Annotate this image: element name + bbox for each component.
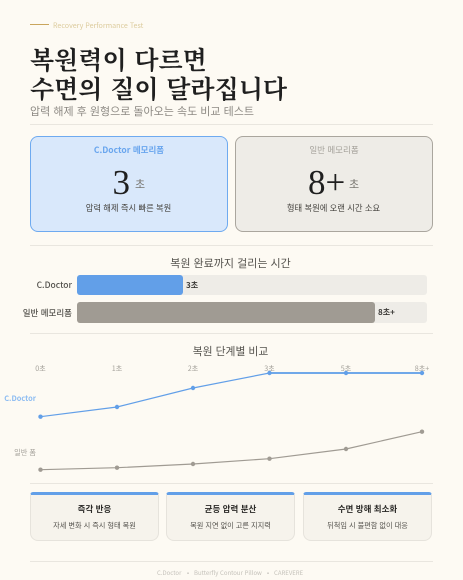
big number: 8+ bbox=[308, 163, 345, 202]
footer: CAREVERE bbox=[274, 568, 303, 577]
axis labels: 1초 bbox=[112, 364, 123, 374]
axis labels: 3초 bbox=[264, 364, 275, 374]
footer: • bbox=[187, 568, 189, 577]
feature title: 균등 압력 분산 bbox=[205, 503, 256, 515]
panel: C.Doctor result bbox=[30, 136, 228, 232]
series: C.Doctor bbox=[4, 371, 424, 419]
footer: C.Doctor bbox=[157, 568, 181, 577]
unit: 초 bbox=[349, 176, 359, 192]
heading: bar chart: 복원 완료까지 걸리는 시간 bbox=[170, 255, 291, 271]
bar row: regular foam: 일반 메모리폼 bbox=[23, 307, 72, 319]
description: 형태 복원에 오랜 시간 소요 bbox=[287, 202, 380, 214]
unit: 초 bbox=[135, 176, 145, 192]
description: 압력 해제 즉시 빠른 복원 bbox=[86, 202, 171, 214]
series: regular foam: 일반 폼 bbox=[14, 448, 36, 458]
bar row: regular foam: 8초+ bbox=[378, 307, 395, 318]
axis labels: 8초+ bbox=[415, 364, 429, 374]
footer: Butterfly Contour Pillow bbox=[194, 568, 262, 577]
panel heading: 일반 메모리폼 bbox=[309, 144, 359, 156]
footer: • bbox=[267, 568, 269, 577]
panel: regular foam result bbox=[235, 136, 433, 232]
title bbox=[30, 41, 287, 106]
title: 수면의 질이 달라집니다 bbox=[30, 70, 287, 106]
bar row: C.Doctor: 3초 bbox=[186, 280, 198, 291]
subtitle: 압력 해제 후 원형으로 돌아오는 속도 비교 테스트 bbox=[30, 103, 254, 119]
axis labels: 0초 bbox=[35, 364, 46, 374]
feature description: 자세 변화 시 즉시 형태 복원 bbox=[53, 521, 136, 531]
bar row: C.Doctor bbox=[37, 275, 427, 295]
feature description: 뒤척임 시 불편함 없이 대응 bbox=[327, 521, 408, 531]
feature card: instant response bbox=[30, 492, 159, 541]
footer bbox=[157, 568, 303, 577]
title: 복원력이 다르면 bbox=[30, 41, 207, 77]
axis labels bbox=[35, 364, 429, 374]
series: regular foam bbox=[14, 430, 424, 472]
bar row: regular foam bbox=[23, 302, 427, 323]
heading: line chart: 복원 단계별 비교 bbox=[193, 343, 268, 359]
series: C.Doctor: C.Doctor bbox=[4, 393, 37, 404]
line chart bbox=[4, 364, 429, 472]
axis labels: 5초 bbox=[341, 364, 352, 374]
eyebrow label: Recovery Performance Test bbox=[53, 21, 143, 31]
feature card: minimal disturbance bbox=[303, 492, 432, 541]
panel heading: C.Doctor 메모리폼 bbox=[94, 144, 164, 156]
bar row: C.Doctor: C.Doctor bbox=[37, 279, 72, 291]
big number: 3 bbox=[112, 163, 130, 202]
axis labels: 2초 bbox=[188, 364, 199, 374]
feature title: 즉각 반응 bbox=[78, 503, 111, 515]
feature card: even pressure bbox=[166, 492, 295, 541]
bar chart bbox=[23, 275, 427, 323]
feature description: 복원 지연 없이 고른 지지력 bbox=[190, 521, 271, 531]
feature title: 수면 방해 최소화 bbox=[338, 503, 397, 515]
